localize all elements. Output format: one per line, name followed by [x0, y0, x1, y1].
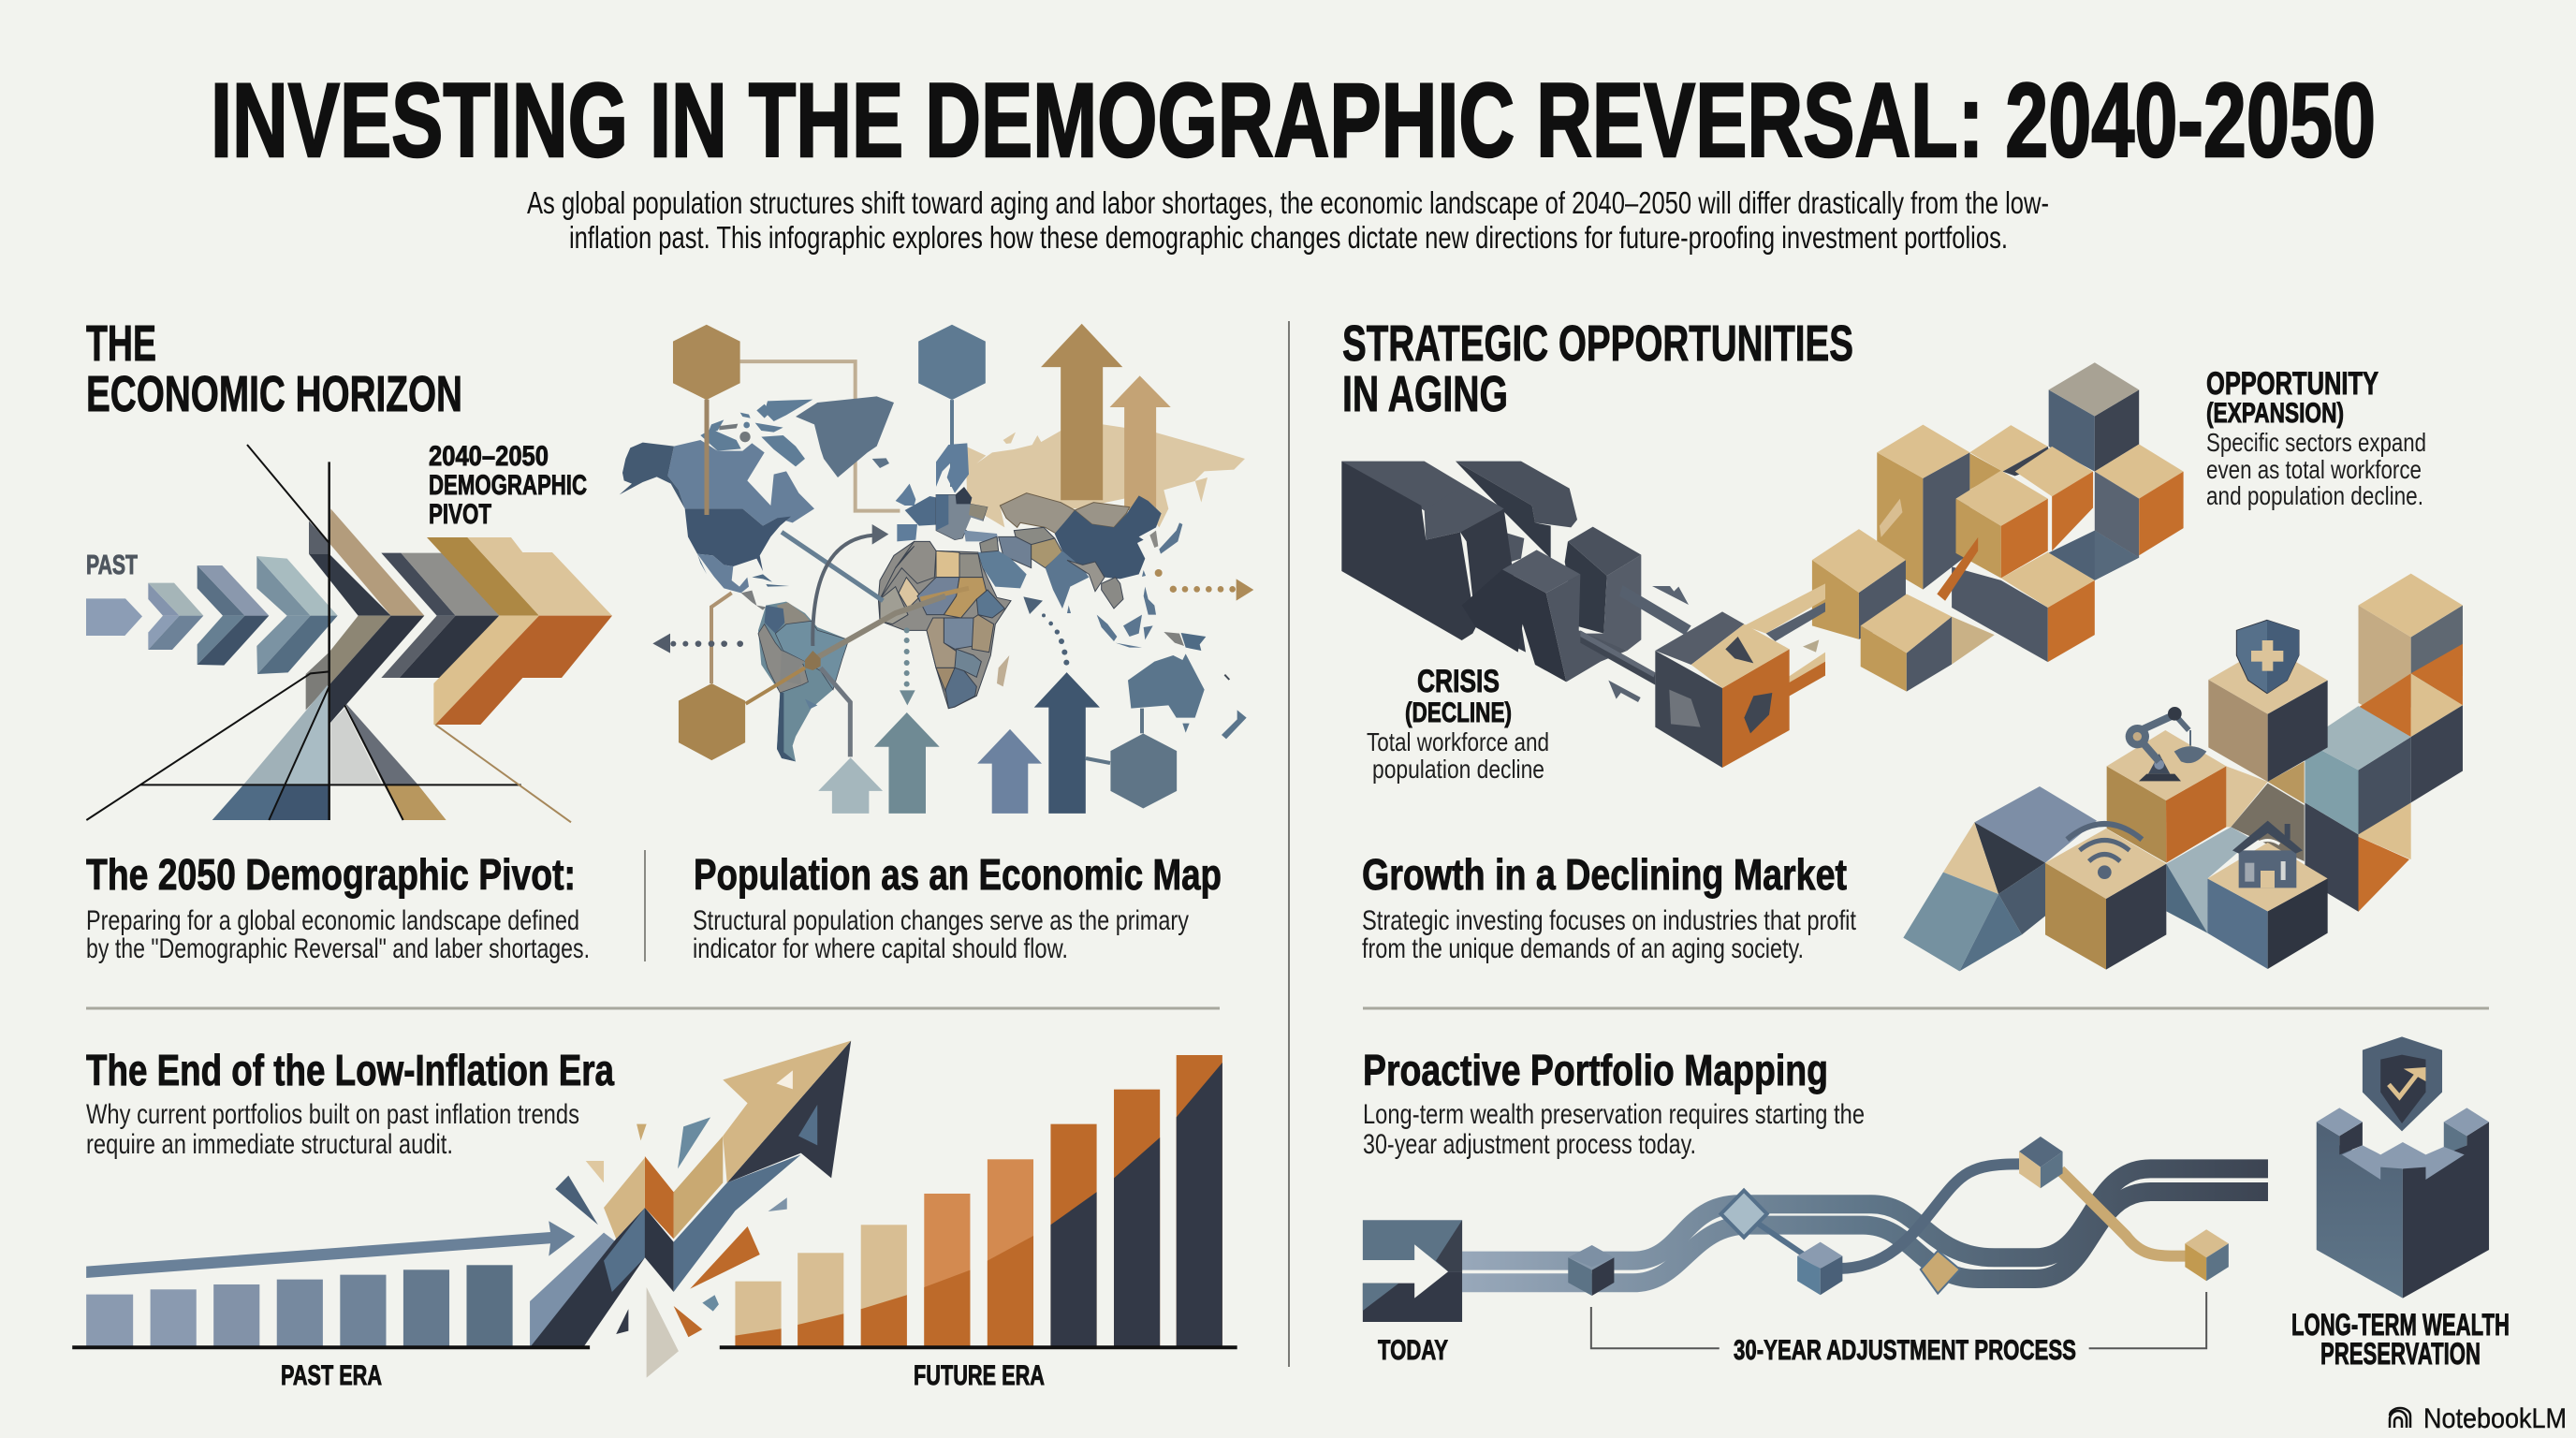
label: crisis: (DECLINE): [1405, 697, 1512, 728]
text block: proactive portfolio mapping: [1363, 1046, 1865, 1160]
intro text: As global population structures shift toward aging and labor shortages, the economic landscape of 2040–2050 will differ drastically from the low-: [527, 185, 2049, 220]
label: demographic pivot: DEMOGRAPHIC: [429, 470, 587, 501]
dotted arrow: left: [652, 634, 743, 653]
section heading: strategic opportunities: IN AGING: [1342, 366, 1508, 422]
hexagon: gold bottom: [679, 683, 745, 760]
diagram: chevrons pivot: [86, 445, 612, 822]
text block: growth in a declining market: from the unique demands of an aging society.: [1362, 933, 1804, 964]
label: crisis: Total workforce and: [1367, 727, 1549, 756]
greenland: [796, 396, 894, 477]
arrow: tan: [1110, 375, 1171, 510]
connector lines: [707, 400, 945, 756]
arrow: tall gold: [1041, 324, 1122, 500]
diagram: portfolio pathway: [1363, 1036, 2489, 1348]
text block: the 2050 demographic pivot: [86, 850, 590, 964]
africa: [878, 541, 1011, 709]
mexico: [697, 554, 749, 593]
text block: end of low-inflation era: require an immediate structural audit.: [86, 1129, 453, 1160]
label: opportunity: even as total workforce: [2206, 455, 2422, 484]
text block: the 2050 demographic pivot: by the "Demographic Reversal" and laber shortages.: [86, 933, 590, 964]
cube with house: [2207, 821, 2328, 969]
label: future era: FUTURE ERA: [914, 1360, 1045, 1391]
section heading: the economic horizon: [86, 315, 462, 422]
text block: population as an economic map: Population as an Economic Map: [694, 850, 1222, 899]
arrows: rising bottom: [818, 672, 1100, 814]
europe west: [896, 484, 945, 541]
text block: population as an economic map: [693, 850, 1222, 964]
past era bars: [86, 1265, 513, 1347]
section heading: strategic opportunities: STRATEGIC OPPORTUNITIES: [1342, 315, 1853, 372]
intro text: [527, 185, 2049, 255]
tower: [2317, 1108, 2489, 1299]
intro text: inflation past. This infographic explores how these demographic changes dictate new directions for future-proofing investment portfolios.: [569, 220, 2008, 255]
text block: proactive portfolio mapping: Long-term wealth preservation requires starting the: [1363, 1099, 1865, 1130]
section heading: the economic horizon: THE: [86, 315, 156, 372]
label: opportunity: Specific sectors expand: [2206, 428, 2426, 457]
dotted arrow: right: [1155, 569, 1253, 601]
text block: end of low-inflation era: Why current portfolios built on past inflation trends: [86, 1099, 579, 1130]
text block: growth in a declining market: Strategic investing focuses on industries that profit: [1362, 905, 1857, 936]
crumbling wall and broken cube: [1341, 462, 1825, 768]
text block: population as an economic map: indicator for where capital should flow.: [693, 933, 1068, 964]
today box arrow: [1363, 1220, 1462, 1322]
shattering arrow: [530, 1041, 851, 1378]
label: 30-year adjustment process: 30-YEAR ADJUSTMENT PROCESS: [1734, 1335, 2076, 1366]
label: past: PAST: [86, 550, 138, 580]
tall right column: [2305, 574, 2463, 912]
west land: americas: [620, 396, 945, 761]
text block: population as an economic map: Structural population changes serve as the primary: [693, 905, 1189, 936]
label: opportunity: (EXPANSION): [2206, 398, 2344, 429]
dotted arrow: up-left: [1023, 596, 1069, 666]
thin links: [1744, 1164, 2188, 1269]
text block: growth in a declining market: [1362, 850, 1857, 964]
dotted arrow: down: [900, 627, 915, 705]
shield with check: [2363, 1036, 2442, 1131]
illustration: crumbling blocks to expansion: [1341, 362, 2184, 768]
asia: [978, 493, 1162, 609]
text block: end of low-inflation era: [86, 1046, 614, 1160]
alaska: [620, 443, 685, 508]
expansion cube cluster: [1812, 362, 2184, 692]
chart: past vs future era: [72, 1041, 1237, 1378]
label: opportunity: [2206, 366, 2426, 510]
south america: [758, 602, 849, 761]
label: opportunity: and population decline.: [2206, 481, 2423, 510]
bracket: [1591, 1292, 2206, 1348]
hexagon: blue top: [918, 325, 986, 400]
label: past era: PAST ERA: [281, 1360, 382, 1391]
trend arrow: [86, 1221, 575, 1278]
australia: [1128, 653, 1205, 718]
label: crisis: CRISIS: [1417, 664, 1500, 699]
label: crisis: [1367, 664, 1549, 784]
center divider: [1288, 321, 1290, 1367]
text block: proactive portfolio mapping: Proactive Portfolio Mapping: [1363, 1046, 1828, 1094]
east land: europe, africa, asia, oceania: [878, 443, 1247, 763]
text block: end of low-inflation era: The End of the Low-Inflation Era: [86, 1046, 614, 1094]
cube with shield: [2208, 620, 2328, 782]
section heading: strategic opportunities: [1342, 315, 1853, 422]
world map with arrows: [620, 324, 1253, 814]
text block: the 2050 demographic pivot: Preparing for a global economic landscape defined: [86, 905, 579, 936]
hexagon: blue bottom: [1110, 734, 1177, 809]
label: today: TODAY: [1378, 1335, 1448, 1366]
text block: the 2050 demographic pivot: The 2050 Demographic Pivot:: [86, 850, 576, 899]
hexagon: gold top: [673, 325, 740, 400]
cube with wifi: [2045, 824, 2166, 970]
label: demographic pivot: [429, 441, 587, 530]
united states: [685, 508, 791, 571]
label: demographic pivot: 2040–2050: [429, 441, 549, 472]
milestone cubes: [1568, 1137, 2229, 1296]
label: long-term wealth preservation: PRESERVATION: [2320, 1337, 2481, 1371]
label: crisis: population decline: [1372, 755, 1544, 784]
filler facets: [2226, 766, 2268, 827]
section heading: the economic horizon: ECONOMIC HORIZON: [86, 366, 462, 422]
gold flow mark: [920, 588, 969, 599]
cube with robot arm: [2107, 707, 2226, 863]
illustration: sector cube stack: [1903, 574, 2463, 971]
text block: proactive portfolio mapping: 30-year adjustment process today.: [1363, 1129, 1696, 1160]
russia: [966, 423, 1245, 527]
future era bars: [735, 1055, 1222, 1346]
europe east: [936, 443, 999, 541]
label: demographic pivot: PIVOT: [429, 499, 491, 530]
wedge block: [1903, 786, 2097, 971]
label: long-term wealth preservation: [2291, 1308, 2510, 1371]
canadian arctic: [700, 400, 812, 466]
islands: [1067, 522, 1206, 651]
canada: [667, 440, 814, 526]
text block: growth in a declining market: Growth in a Declining Market: [1362, 850, 1847, 899]
ribbons: [1462, 1168, 2268, 1283]
label: opportunity: OPPORTUNITY: [2206, 366, 2378, 402]
